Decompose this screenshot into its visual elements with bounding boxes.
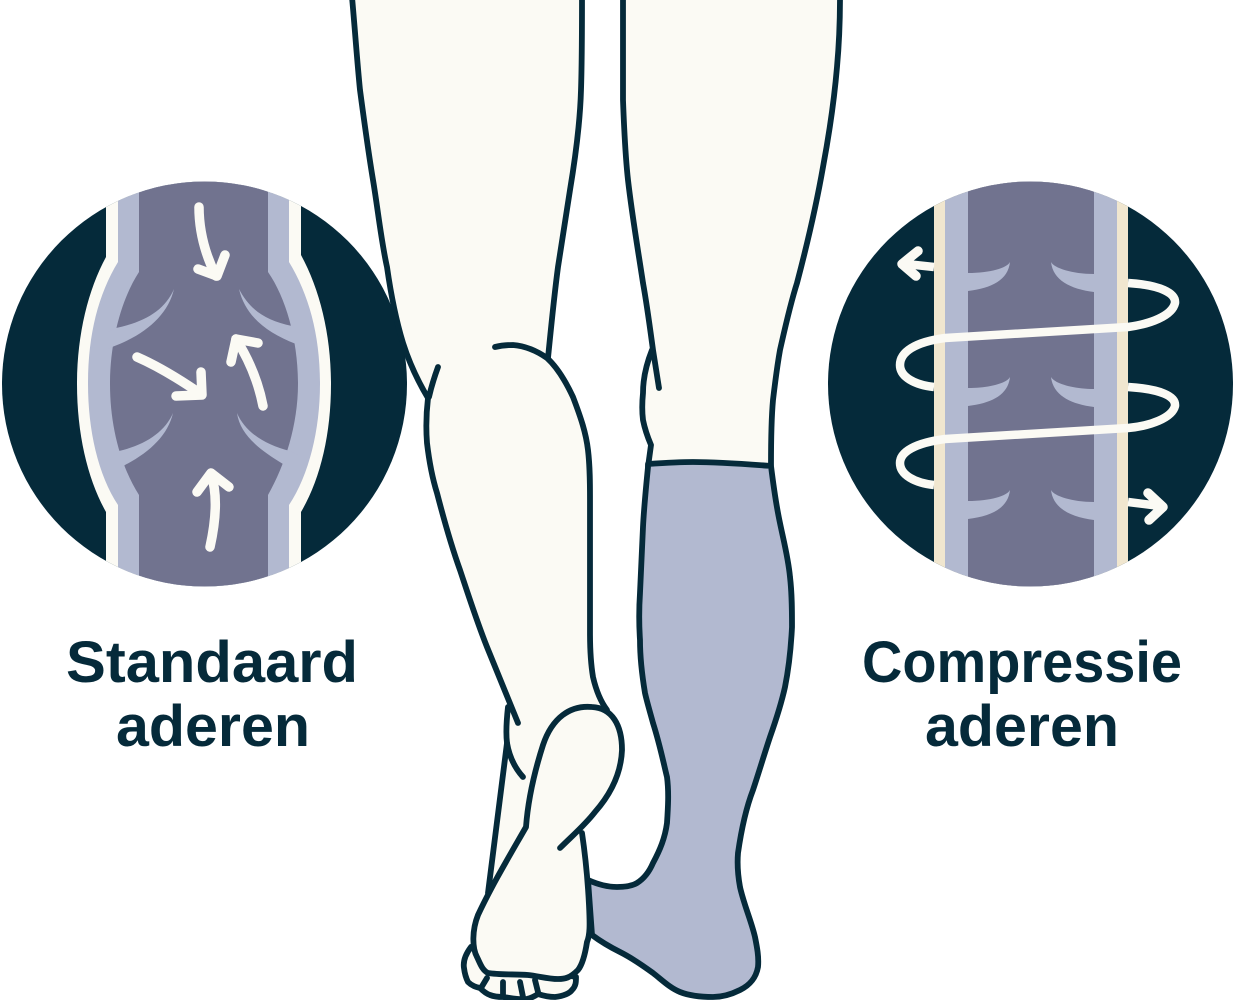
label: compression veins: aderen <box>925 694 1119 759</box>
arrows: blood pooling <box>137 207 263 547</box>
spiral compression arrow <box>900 251 1175 520</box>
compression stocking <box>588 462 792 997</box>
right stockinged leg, bare thigh <box>623 0 840 467</box>
vein lavender wall <box>88 192 320 576</box>
toes <box>464 947 576 999</box>
vein outer wall <box>77 170 331 600</box>
panel: compression veins circle <box>825 170 1235 600</box>
valves <box>108 289 302 470</box>
vein interior <box>968 170 1094 600</box>
toe separators <box>481 978 538 997</box>
illustration: legs <box>352 0 840 999</box>
label: compression veins: Compressie <box>862 630 1182 695</box>
vein wall <box>945 192 1117 576</box>
label: standard veins: Standaard <box>66 630 358 695</box>
label: standard veins: aderen <box>116 694 310 759</box>
valves <box>968 262 1094 520</box>
panel: standard veins circle <box>0 170 410 600</box>
left bare leg <box>352 0 607 900</box>
label: compression veins <box>862 630 1182 759</box>
compression band <box>934 170 1128 600</box>
raised foot sole <box>473 707 622 979</box>
vein interior <box>110 170 298 600</box>
label: standard veins <box>66 630 358 759</box>
